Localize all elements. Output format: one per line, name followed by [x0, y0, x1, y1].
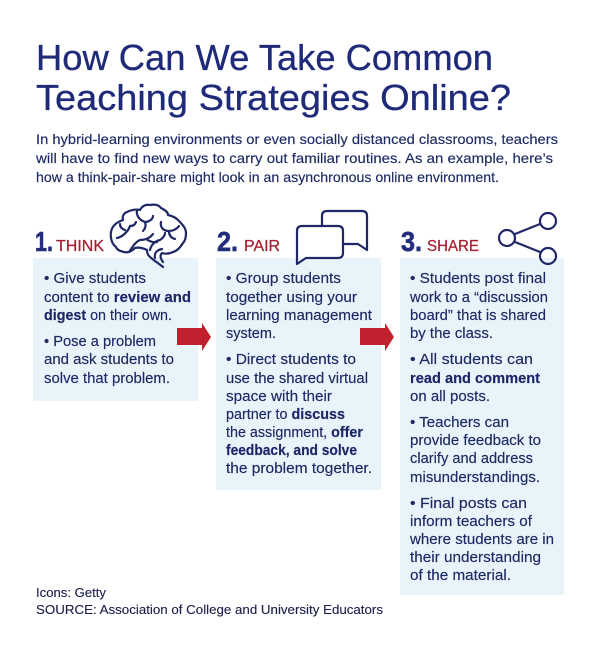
heading: 3. share	[401, 226, 479, 257]
text: think bullets: content to review and	[44, 290, 191, 306]
heading: 2. pair: PAIR	[244, 238, 280, 255]
arrow: pair to share	[360, 323, 394, 351]
text: pair bullets: learning management	[226, 308, 372, 324]
heading: 1. think	[35, 226, 105, 257]
text: think bullets: • Give students	[44, 271, 146, 287]
text: pair bullets: the problem together.	[226, 461, 372, 477]
heading: 3. share: 3.	[401, 226, 422, 257]
heading: 3. share: SHARE	[427, 238, 479, 255]
text: share bullets: work to a “discussion	[409, 290, 548, 306]
text: share bullets: on all posts.	[410, 389, 490, 405]
text: share bullets: misunderstandings.	[410, 470, 540, 486]
text: think bullets: • Pose a problem	[44, 334, 156, 350]
text: share bullets: of the material.	[410, 568, 511, 584]
text: share bullets: clarify and address	[410, 451, 533, 467]
text: share bullets: • All students can	[410, 352, 533, 368]
text: pair bullets	[226, 271, 372, 477]
icon: share nodes	[499, 213, 556, 264]
title	[36, 37, 511, 118]
text: share bullets: where students are in	[409, 532, 554, 548]
text: share bullets: their understanding	[410, 550, 541, 566]
panel: share	[400, 213, 564, 595]
heading: 1. think: 1.	[35, 226, 53, 257]
icon: brain	[111, 205, 186, 267]
intro text	[35, 131, 558, 185]
text: share bullets: board” that is shared	[410, 308, 546, 324]
text: think bullets: and ask students to	[44, 352, 174, 368]
text: think bullets: digest on their own.	[44, 308, 172, 324]
text: pair bullets: space with their	[226, 389, 332, 405]
text: share bullets: • Final posts can	[410, 496, 527, 512]
text: share bullets: • Students post final	[410, 271, 546, 287]
heading: 2. pair: 2.	[217, 226, 238, 257]
footer: credits: Icons: Getty	[36, 586, 107, 600]
text: share bullets: by the class.	[410, 326, 493, 342]
text: pair bullets: feedback, and solve	[226, 443, 357, 459]
text: think bullets: solve that problem.	[44, 371, 170, 387]
text: think bullets	[44, 271, 191, 387]
text: share bullets: inform teachers of	[410, 514, 533, 530]
intro text: In hybrid-learning environments or even socially distanced classrooms, teachers	[36, 131, 558, 147]
footer: credits: SOURCE: Association of College and University Educators	[36, 603, 383, 617]
text: share bullets: provide feedback to	[410, 433, 541, 449]
text: pair bullets: system.	[226, 326, 276, 342]
icon: speech bubbles	[297, 211, 367, 264]
text: pair bullets: use the shared virtual	[226, 371, 368, 387]
text: pair bullets: • Direct students to	[226, 352, 356, 368]
footer: credits	[36, 586, 383, 617]
intro text: will have to find new ways to carry out familiar routines. As an example, here’s	[35, 150, 553, 166]
text: pair bullets: partner to discuss	[226, 407, 345, 423]
title: How Can We Take Common	[36, 37, 493, 78]
text: share bullets	[409, 271, 554, 584]
heading: 2. pair	[217, 226, 280, 257]
text: pair bullets: together using your	[226, 290, 357, 306]
panel: pair	[216, 211, 381, 490]
arrow: think to pair	[177, 323, 211, 351]
text: share bullets: • Teachers can	[410, 415, 509, 431]
text: pair bullets: • Group students	[226, 271, 341, 287]
title: Teaching Strategies Online?	[36, 77, 511, 118]
intro text: how a think-pair-share might look in an asynchronous online environment.	[36, 169, 499, 185]
panel: think	[33, 205, 198, 401]
text: share bullets: read and comment	[410, 371, 540, 387]
text: pair bullets: the assignment, offer	[226, 425, 363, 441]
heading: 1. think: THINK	[56, 238, 105, 255]
